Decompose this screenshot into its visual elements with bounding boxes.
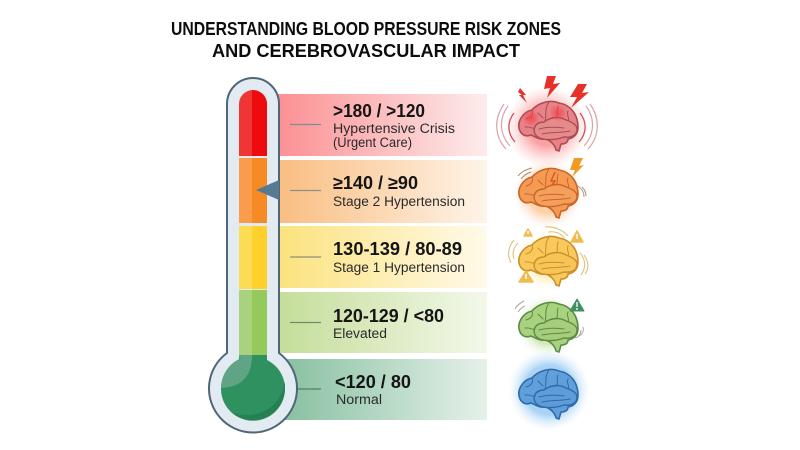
panel: stage 1 hypertension band: Stage 1 Hypertension	[333, 260, 465, 275]
icon: elevated brain	[515, 293, 584, 359]
panel: hypertensive crisis band: >180 / >120	[333, 101, 425, 121]
panel: hypertensive crisis band	[276, 94, 487, 156]
panel: elevated band: Elevated	[333, 326, 387, 341]
panel: normal band: Normal	[336, 392, 382, 407]
panel: elevated band: 120-129 / <80	[333, 306, 444, 326]
red segment	[239, 90, 267, 156]
panel: normal band: <120 / 80	[335, 372, 411, 392]
orange segment	[239, 158, 267, 223]
warning triangle	[570, 299, 584, 311]
title	[171, 18, 561, 61]
yellow segment	[239, 226, 267, 289]
panel: hypertensive crisis band: Hypertensive Crisis	[333, 121, 455, 136]
icon: stage 2 brain	[513, 158, 586, 229]
thermometer	[209, 78, 297, 432]
panel: stage 2 hypertension band	[276, 160, 487, 223]
light green segment	[239, 290, 267, 356]
panel: stage 1 hypertension band: 130-139 / 80-89	[333, 239, 462, 259]
panel: stage 1 hypertension band	[276, 226, 487, 288]
panel: elevated band	[276, 292, 487, 353]
title: AND CEREBROVASCULAR IMPACT	[212, 40, 521, 61]
panel: stage 2 hypertension band: Stage 2 Hypertension	[333, 194, 465, 209]
lightning bolts	[518, 76, 589, 108]
panel: stage 2 hypertension band: ≥140 / ≥90	[333, 173, 418, 193]
panel: hypertensive crisis band: (Urgent Care)	[333, 135, 412, 150]
green bulb	[218, 355, 285, 421]
panel: normal band	[270, 359, 487, 420]
icon: crisis brain	[497, 76, 597, 168]
warning triangles	[519, 229, 583, 282]
title: UNDERSTANDING BLOOD PRESSURE RISK ZONES	[171, 18, 561, 39]
pointer arrow	[256, 180, 279, 200]
icon: stage 1 brain	[509, 227, 588, 292]
lightning bolt	[570, 158, 584, 177]
icon: normal brain	[508, 349, 590, 431]
